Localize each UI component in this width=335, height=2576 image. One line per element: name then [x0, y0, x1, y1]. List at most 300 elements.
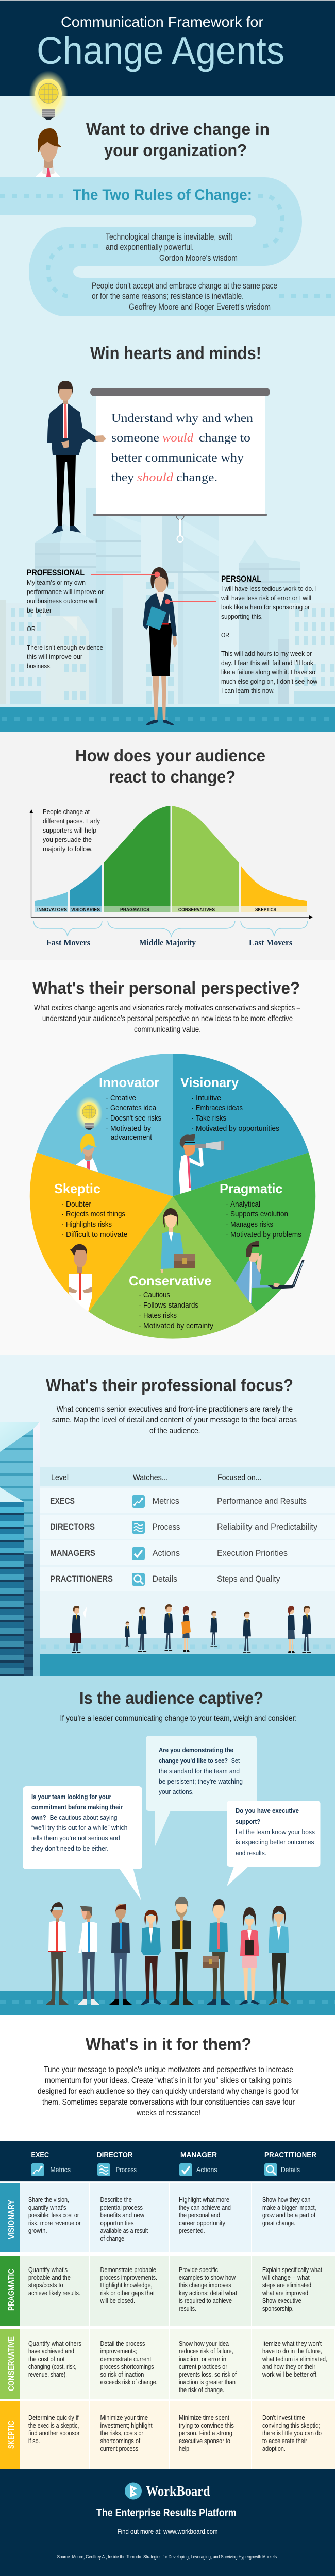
table header: audience levels: EXEC [31, 2150, 49, 2159]
road: ground strip [0, 707, 335, 732]
row: managers: Execution Priorities [217, 1548, 288, 1558]
table row: skeptic: convincing this skeptic; [262, 2421, 320, 2429]
source note: Source: Moore, Geoffrey A., Inside the Tornado: Strategies for Developing, Leveraging, and Surviving Hypergrowth Markets [57, 2554, 277, 2560]
labels: mover groups: Middle Majority [139, 938, 196, 947]
illustration: team woman pink jacket [239, 1907, 260, 2005]
table row: conservative: prevents loss, so risk of [179, 2370, 237, 2378]
table row: visionary: Show how they can [262, 2196, 310, 2204]
text: tune your message: Tune your message to people's unique motivators and perspectives to increase [44, 2065, 293, 2074]
table row: skeptic: SKEPTIC [7, 2421, 16, 2449]
speech bubble: demonstrating change: Are you demonstrating the [159, 1746, 233, 1754]
footer link text: Find out more at: www.workboard.com [118, 2527, 217, 2535]
slice: innovator: · [106, 1124, 108, 1133]
illustration: conservative woman [160, 1208, 195, 1273]
table row: pragmatic: will change -- what [262, 2274, 310, 2281]
illustration: team man white shirt [46, 1902, 69, 2005]
table row: skeptic: the exec is a skeptic, [28, 2421, 79, 2429]
table row: visionary: VISIONARY [7, 2200, 16, 2239]
table header: audience levels: PRACTITIONER [264, 2150, 316, 2159]
table: level focus: Level [51, 1472, 69, 1482]
row: execs [40, 1488, 335, 1513]
table: level focus: Focused on... [217, 1472, 262, 1482]
speech bubble: demonstrating change: the standard for the team and [159, 1767, 240, 1775]
slice: innovator: Motivated by [110, 1124, 151, 1133]
slice: skeptic: · [61, 1230, 64, 1239]
slice: pragmatic: Motivated by problems [230, 1230, 301, 1239]
callout: professional: our business outcome will [27, 597, 97, 605]
table row: conservative: and how they or their [262, 2363, 316, 2370]
table row: pragmatic: PRAGMATIC [7, 2269, 16, 2311]
table row: skeptic: help. [179, 2445, 191, 2452]
text: tune your message [38, 2065, 300, 2117]
table row: pragmatic: Quantify what's [28, 2266, 68, 2274]
slice: visionary: · [191, 1124, 194, 1133]
table row: conservative: Quantify what others [28, 2340, 81, 2347]
table row: skeptic: executive sponsor to [179, 2437, 230, 2445]
text: captive intro: If you’re a leader communicating change to your team, weigh and consider: [60, 1714, 297, 1723]
table row: conservative: the cost of not [28, 2355, 65, 2363]
illustration: team man blue jacket with briefcase [203, 1899, 230, 2005]
table row: pragmatic: results. [179, 2304, 196, 2312]
chart: adoption bell curve: VISIONARIES [71, 907, 100, 913]
slice: visionary: Visionary [180, 1075, 239, 1090]
slice: conservative: · [139, 1311, 141, 1320]
panel: professional focus [0, 1355, 335, 1676]
table: level focus: Watches... [133, 1472, 168, 1482]
text: people change note: different paces. Early [43, 817, 100, 825]
table row: visionary: potential process [100, 2204, 143, 2211]
background: city skyline [0, 488, 335, 707]
table header: audience levels: Details [281, 2165, 300, 2174]
speech bubble: team commitment: tells them you’re not serious and [31, 1834, 120, 1842]
chart axes [30, 809, 313, 919]
chart: adoption bell curve: CONSERVATIVES [178, 907, 215, 913]
table row: conservative: work will be better off. [262, 2370, 318, 2378]
table row: skeptic: Minimize time spent [179, 2414, 229, 2421]
slice: skeptic: Highlights risks [66, 1220, 112, 1229]
row: managers: MANAGERS [50, 1548, 95, 1558]
illustration: team man navy suit [109, 1904, 132, 2005]
speech bubble: executive support: and results. [236, 1849, 266, 1857]
slice: skeptic: Rejects most things [66, 1210, 125, 1218]
speech bubble: demonstrating change [146, 1736, 257, 1846]
text: screen message: they [111, 471, 135, 484]
speech bubble: executive support: Let the team know your boss [236, 1828, 315, 1836]
text: rule one: Gordon Moore's wisdom [159, 253, 238, 263]
table row: visionary: presented. [179, 2227, 205, 2234]
speech bubble: executive support [227, 1801, 321, 1886]
table row: conservative: process shortcomings [100, 2363, 154, 2370]
slice: visionary: Embraces ideas [196, 1104, 243, 1112]
table row: pragmatic: steps/costs to [28, 2281, 63, 2289]
row: execs: EXECS [50, 1496, 75, 1506]
text: perspective intro: communicating value. [134, 1025, 201, 1034]
table row: skeptic: Don't invest time [262, 2414, 305, 2421]
callout: professional: performance will improve or [27, 588, 104, 596]
row: directors: DIRECTORS [50, 1522, 95, 1532]
text: screen message [111, 412, 254, 484]
slice: innovator: Doesn't see risks [110, 1114, 161, 1123]
table row: skeptic: adoption. [262, 2445, 286, 2452]
table row: conservative: demonstrate current [100, 2355, 152, 2363]
text: people change note: supporters will help [43, 826, 96, 834]
table row: skeptic: there is little you can do [262, 2429, 322, 2437]
table row: pragmatic: Provide specific [179, 2266, 218, 2274]
table row: pragmatic [0, 2256, 335, 2326]
labels: mover groups: Fast Movers [46, 938, 90, 947]
illustration: office people [70, 1604, 311, 1653]
speech bubble: executive support: support? [236, 1818, 260, 1825]
speech bubble: team commitment: they don’t need to be either. [31, 1844, 109, 1852]
slice: innovator: · [106, 1094, 108, 1103]
speech bubble: team commitment: own? [31, 1814, 46, 1821]
slice: conservative: Cautious [143, 1291, 170, 1299]
slice: pragmatic: · [226, 1210, 228, 1218]
text: focus intro [52, 1405, 297, 1435]
table row: visionary: the personal and [179, 2211, 220, 2219]
table row: skeptic: shortcomings of [100, 2437, 140, 2445]
table row: conservative: have achieved and [28, 2347, 74, 2355]
slice: visionary [180, 1075, 279, 1133]
table row: skeptic: investment; highlight [100, 2421, 153, 2429]
text: rule one: and exponentially powerful. [106, 243, 194, 252]
slice: conservative: Follows standards [143, 1301, 198, 1310]
heading: how does your audience react: react to change? [109, 767, 236, 786]
illustration: innovator person [76, 1134, 98, 1172]
illustration: team man bearded [78, 1906, 99, 2005]
icon: light bulb with brain [29, 71, 68, 120]
row: directors [40, 1515, 335, 1539]
chart: adoption bell curve [30, 806, 313, 919]
slice: visionary: · [191, 1094, 194, 1103]
heading: how does your audience react [75, 746, 265, 786]
speech bubble: team commitment: Is your team looking for your [31, 1793, 111, 1801]
text: screen message: better communicate why [111, 451, 244, 464]
table row: pragmatic: what are improved. [262, 2289, 310, 2297]
table row: conservative: inaction, or error in [179, 2355, 226, 2363]
table header: audience levels [0, 2141, 335, 2181]
slice: conservative: Motivated by certainty [143, 1321, 213, 1330]
table header: audience levels: Process [116, 2165, 137, 2174]
table row: conservative: reduces risk of failure, [179, 2347, 233, 2355]
table row: visionary: risk, more revenue or [28, 2219, 81, 2227]
table row: conservative: CONSERVATIVE [7, 2336, 16, 2391]
speech bubble: demonstrating change: change you'd like to see? [159, 1757, 228, 1765]
street: walkway and road [40, 1591, 335, 1676]
brand name: WorkBoard [146, 2483, 210, 2499]
slice: pragmatic: Supports evolution [230, 1210, 288, 1218]
slice: skeptic [54, 1181, 128, 1239]
callout: professional: PROFESSIONAL [27, 568, 85, 578]
table row: pragmatic: sponsorship. [262, 2304, 294, 2312]
text: screen message: should [137, 471, 174, 484]
speech bubble: team commitment: “we’ll try this out for a while” which [31, 1824, 128, 1832]
slice: pragmatic: · [226, 1220, 228, 1229]
row: directors: Process [153, 1522, 180, 1532]
table row: visionary: possible: less cost or [28, 2211, 79, 2219]
panel: personal perspective [0, 960, 335, 1355]
slice: conservative: · [139, 1291, 141, 1299]
table row: pragmatic: Show executive [262, 2297, 301, 2304]
labels: mover groups [46, 938, 292, 947]
slice: pragmatic: Pragmatic [220, 1181, 282, 1196]
text: screen message: would [162, 431, 194, 444]
slice: skeptic: Doubter [66, 1200, 91, 1209]
callout: personal: supporting this. [221, 613, 263, 620]
speech bubble: team commitment: Be cautious about saying [50, 1814, 118, 1821]
table row: conservative: so risk of inaction [100, 2370, 144, 2378]
text: perspective intro [34, 1004, 300, 1034]
callout: professional: OR [27, 625, 36, 633]
section background: intro [0, 96, 335, 707]
heading: personal perspective: What's their personal perspective? [32, 978, 300, 997]
table row: visionary: career opportunity [179, 2219, 225, 2227]
table row: visionary: great change. [262, 2219, 295, 2227]
callout: professional: My team’s or my own [27, 579, 86, 586]
row: execs: Performance and Results [217, 1496, 307, 1506]
panel: captive audience [0, 1676, 335, 2015]
chart: adoption bell curve: PRAGMATICS [120, 907, 149, 913]
heading: professional focus: What's their professional focus? [46, 1376, 293, 1395]
table row: skeptic: Determine quickly if [28, 2414, 79, 2421]
slice: visionary: Take risks [196, 1114, 226, 1123]
table row: visionary: opportunities [100, 2219, 134, 2227]
callout: personal: will have less risk of error or I will [221, 594, 311, 602]
slice: innovator: advancement [111, 1133, 153, 1142]
slice: pragmatic: · [226, 1200, 228, 1209]
text: tune your message: momentum for your ideas. Create “what’s in it for you” slides or talking points [45, 2076, 292, 2085]
table row: conservative: exceeds risk of change. [100, 2378, 158, 2386]
table row: skeptic [0, 2401, 335, 2469]
illustration: man with idea [36, 128, 61, 177]
callout: personal: like a failure along with it. I have so [221, 668, 315, 676]
slice: innovator [99, 1075, 161, 1142]
chart: persona pie [30, 1054, 315, 1339]
panel: projector screen [90, 388, 270, 542]
text: focus intro: of the audience. [149, 1427, 200, 1435]
table header: audience levels: Actions [196, 2165, 217, 2174]
table row: pragmatic: is required to achieve [179, 2297, 232, 2304]
heading: how does your audience react: How does your audience [75, 746, 265, 765]
table row: skeptic: person. Find a strong [179, 2429, 232, 2437]
slice: visionary: · [191, 1114, 194, 1123]
speech bubble: demonstrating change: Set [231, 1757, 240, 1765]
table row: pragmatic: Explain specifically what [262, 2266, 322, 2274]
table row: visionary: they can achieve and [179, 2204, 231, 2211]
table: level focus [40, 1467, 335, 1591]
illustration: team woman light blue jacket [269, 1906, 289, 2005]
row: execs: Metrics [153, 1496, 179, 1506]
text: focus intro: What concerns senior executives and front-line practitioners are rarely the [57, 1405, 293, 1414]
panel: footer [0, 2469, 335, 2576]
panel: audience reaction [0, 732, 335, 960]
slice: pragmatic: · [226, 1230, 228, 1239]
table header: audience levels: Metrics [50, 2165, 71, 2174]
slice: conservative: · [139, 1321, 141, 1330]
slice: pragmatic: Analytical [230, 1200, 260, 1209]
slice: skeptic: · [61, 1200, 64, 1209]
speech bubble: team commitment [23, 1786, 142, 1900]
illustration: pragmatic man with laptop [236, 1241, 305, 1303]
text: focus intro: same. Map the level of detail and content of your message to the focal areas [52, 1416, 297, 1425]
table row: visionary: growth. [28, 2227, 47, 2234]
text: tune your message: them. Sometimes separate conversations with four constituencies can save four [42, 2098, 295, 2107]
table row: conservative: current practices or [179, 2363, 228, 2370]
callout: personal: day. I fear this will fail and I’ll look [221, 659, 313, 667]
slice: skeptic: · [61, 1210, 64, 1218]
illustration: woman with folder [143, 567, 177, 725]
slice: innovator: · [106, 1104, 108, 1112]
slice: visionary: Motivated by opportunities [196, 1124, 279, 1133]
speech bubble: executive support: Do you have executive [236, 1807, 299, 1815]
row: directors: Reliability and Predictability [217, 1522, 317, 1532]
braces [34, 921, 308, 936]
table row: conservative: inaction is greater than [179, 2378, 236, 2386]
slice: conservative [129, 1273, 213, 1330]
text: people change note: majority to follow. [43, 845, 93, 853]
slice: conservative: Conservative [129, 1273, 211, 1289]
table row: skeptic: the risks, costs or [100, 2429, 144, 2437]
row: practitioners [40, 1567, 335, 1591]
table row: pragmatic: steps are eliminated, [262, 2281, 313, 2289]
speech bubble: team commitment: commitment before making their [31, 1803, 123, 1811]
speech bubble: demonstrating change: your actions. [159, 1788, 194, 1795]
callout: personal: much else going on, I don’t see how [221, 677, 318, 685]
table row: pragmatic: this change improves [179, 2281, 231, 2289]
table row: conservative: improvements; [100, 2347, 137, 2355]
slice: innovator: Innovator [99, 1075, 159, 1090]
text: rule two: People don’t accept and embrace change at the same pace [92, 281, 277, 291]
speech bubble: executive support: is expecting better outcomes [236, 1838, 314, 1846]
chart: adoption bell curve: SKEPTICS [255, 907, 276, 913]
callout: personal: look like a hero for sponsoring or [221, 603, 310, 611]
table row: pragmatic: probable and the [28, 2274, 71, 2281]
heading: want to drive change [86, 120, 270, 160]
row: managers [40, 1540, 335, 1565]
callout: professional: this will improve our [27, 653, 83, 660]
text: people change note [43, 808, 100, 853]
table header: audience levels: MANAGER [180, 2150, 217, 2159]
table row: conservative [0, 2329, 334, 2399]
table row: conservative: Show how your idea [179, 2340, 229, 2347]
slice: pragmatic: Manages risks [230, 1220, 273, 1229]
callout: personal [165, 574, 318, 694]
illustration: visionary with telescope [179, 1134, 224, 1194]
table row: conservative: have to do in the future, [262, 2347, 322, 2355]
text: people change note: you persuade the [43, 836, 92, 843]
row: practitioners: Steps and Quality [217, 1574, 280, 1584]
callout: professional: There isn’t enough evidence [27, 643, 103, 651]
slice: visionary: Intuitive [196, 1094, 221, 1103]
table row: skeptic: if so. [28, 2437, 40, 2445]
table row: visionary: make a bigger impact, [262, 2204, 316, 2211]
illustration: team woman blue jacket [141, 1910, 161, 2005]
table row: pragmatic: risk or other gaps that [100, 2289, 155, 2297]
table row: conservative: changing (cost, risk, [28, 2363, 76, 2370]
text: rule one [106, 232, 238, 263]
table row: pragmatic: process improvements. [100, 2274, 157, 2281]
illustration: team man black suit [169, 1897, 194, 2005]
heading: want to drive change: your organization? [104, 141, 247, 160]
text: people change note: People change at [43, 808, 90, 816]
slice: skeptic: Skeptic [54, 1181, 100, 1196]
road: people street [0, 1991, 335, 2015]
table row: pragmatic: will be closed. [100, 2297, 135, 2304]
row: practitioners: PRACTITIONERS [50, 1574, 113, 1584]
table row: pragmatic: Highlight knowledge, [100, 2281, 153, 2289]
table row: pragmatic: examples to show how [179, 2274, 236, 2281]
callout: personal: PERSONAL [221, 574, 261, 584]
table row: skeptic: Minimize your time [100, 2414, 148, 2421]
icon: small bulb [76, 1096, 103, 1130]
table row: skeptic: current process. [100, 2445, 140, 2452]
text: rule one: Technological change is inevitable, swift [106, 232, 232, 242]
slice: pragmatic [220, 1181, 301, 1239]
text: tune your message: designed for each audience so they can quickly understand why change is good for [38, 2087, 300, 2096]
table row: skeptic: trying to convince this [179, 2421, 234, 2429]
illustration: office tower [0, 1422, 40, 1676]
title line two: Change Agents [37, 29, 284, 72]
text: screen message: change to [199, 431, 250, 444]
labels: mover groups: Last Movers [249, 938, 292, 947]
callout: personal: I can learn this now. [221, 687, 275, 694]
row: managers: Actions [153, 1548, 180, 1558]
chart: adoption bell curve: INNOVATORS [37, 907, 67, 913]
table row: visionary [0, 2183, 335, 2252]
callout: professional: business. [27, 662, 52, 670]
table row: skeptic: find another sponsor [28, 2429, 80, 2437]
table row: pragmatic: Demonstrate probable [100, 2266, 156, 2274]
illustration: skeptic man [69, 1244, 92, 1312]
text: screen message: Understand why and when [111, 412, 254, 425]
callout: personal: I will have less tedious work to do. I [221, 585, 317, 592]
table row: conservative: the risk of change. [179, 2386, 224, 2394]
table row: visionary: grow and be a part of [262, 2211, 315, 2219]
slice: visionary: · [191, 1104, 194, 1112]
speech bubble: demonstrating change: be persistent; they’re watching [159, 1777, 243, 1785]
slice: conservative: · [139, 1301, 141, 1310]
callout: personal: This will add hours to my week or [221, 650, 312, 657]
text: rule two [92, 281, 277, 312]
slice: innovator: Generates idea [110, 1104, 157, 1112]
callout: personal: OR [221, 631, 229, 639]
heading: what's in it for them: What's in it for them? [86, 2035, 252, 2054]
tagline: The Enterprise Results Platform [96, 2507, 236, 2519]
table header: audience levels: DIRECTOR [97, 2150, 133, 2159]
table row: visionary: benefits and new [100, 2211, 145, 2219]
row: practitioners: Details [153, 1574, 177, 1584]
table row: visionary: Share the vision, [28, 2196, 69, 2204]
text: tune your message: weeks of resistance! [136, 2109, 200, 2117]
panel: what's in it for them [0, 2015, 335, 2469]
slice: innovator: · [106, 1114, 108, 1123]
table row: visionary: of change. [100, 2234, 126, 2242]
table row: visionary: available as a result [100, 2227, 148, 2234]
icon: workboard logo [125, 2482, 142, 2500]
table row: pragmatic: key actions; detail what [179, 2289, 237, 2297]
slice: skeptic: · [61, 1220, 64, 1229]
callout: professional [27, 568, 160, 670]
table row: visionary: quantify what's [28, 2204, 66, 2211]
panel: two rules road [0, 177, 335, 316]
text: rule two: or for the same reasons; resistance is inevitable. [92, 292, 244, 301]
heading: want to drive change: Want to drive change in [86, 120, 270, 139]
table row: skeptic: to accelerate their [262, 2437, 307, 2445]
heading: is the audience captive: Is the audience captive? [79, 1688, 263, 1707]
text: screen message: change. [176, 471, 217, 484]
heading: the two rules: The Two Rules of Change: [73, 187, 252, 204]
heading: win hearts and minds: Win hearts and minds! [90, 344, 261, 363]
